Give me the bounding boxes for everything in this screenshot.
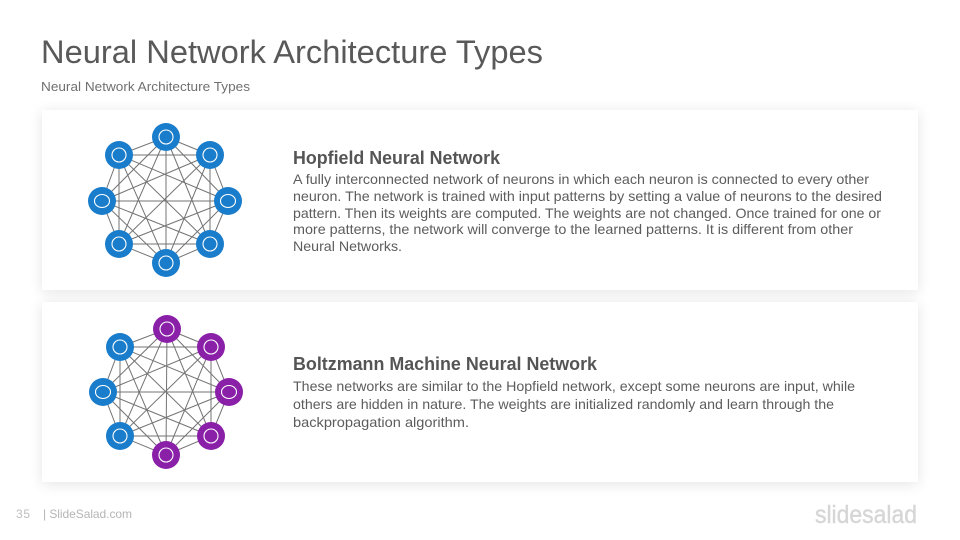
text block: Hopfield description: A fully interconnected network of neurons in which each neuron is connected to every other [293,172,869,187]
text block: Boltzmann description: others are hidden in nature. The weights are initialized randomly and learn through the [293,397,834,412]
text block: Hopfield description: pattern. Then its weights are computed. The weights are not changed. Once trained for one or [293,206,881,221]
panel: Hopfield card [42,110,918,290]
footer source: | SlideSalad.com [43,507,132,521]
text block: Hopfield description: more patterns, the network will converge to the learned patterns. It is different from other [293,222,853,237]
diagram: Hopfield network [88,123,242,277]
heading: Boltzmann: Boltzmann Machine Neural Network [293,354,598,374]
logo wordmark: slidesalad [815,501,917,529]
text block: Boltzmann description: These networks are similar to the Hopfield network, except some neurons are input, while [293,379,855,394]
text block: Hopfield description [293,172,882,254]
diagram: Boltzmann machine network [89,315,243,469]
text block: Hopfield description: neuron. The network is trained with input patterns by setting a value of neurons to the desired [293,189,882,204]
text block: Boltzmann description [293,379,855,430]
page number: 35 [16,507,30,521]
title: Neural Network Architecture Types [41,34,543,70]
text block: Hopfield description: Neural Networks. [293,239,402,254]
panel: Boltzmann card [42,302,918,482]
subtitle: Neural Network Architecture Types [41,79,251,94]
heading: Hopfield: Hopfield Neural Network [293,148,501,168]
text block: Boltzmann description: backpropagation algorithm. [293,415,469,430]
